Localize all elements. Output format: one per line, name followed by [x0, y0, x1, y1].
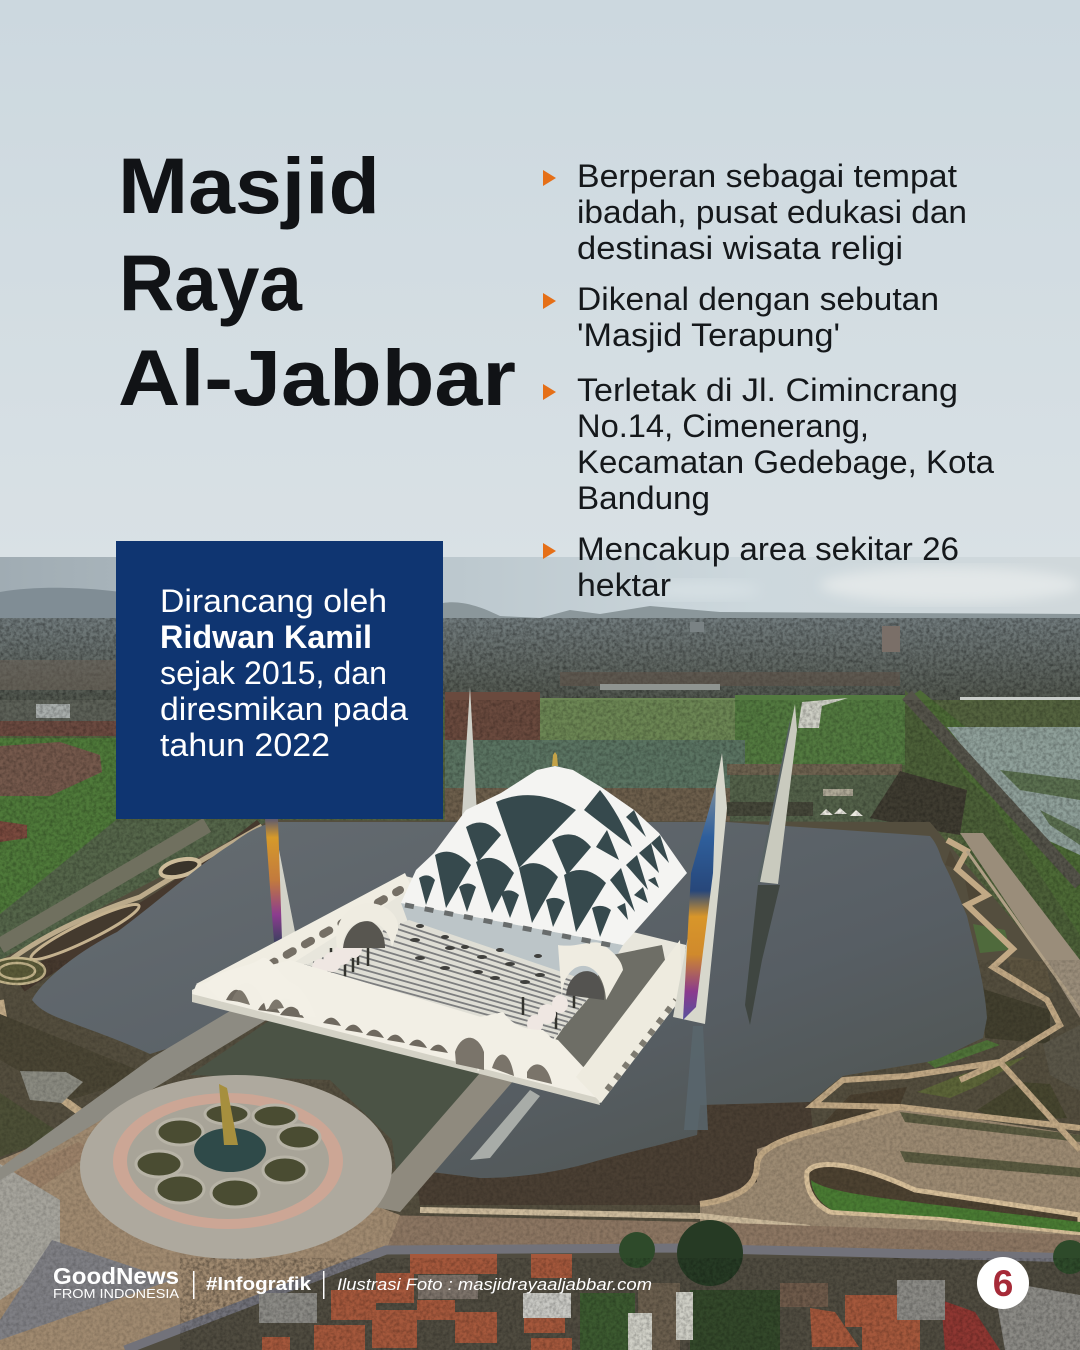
title: Al-Jabbar — [118, 333, 516, 422]
bullet: area — [543, 531, 959, 603]
hashtag: #Infografik — [206, 1274, 312, 1294]
mosque: umbrella columns right — [523, 994, 574, 1034]
mosque: front arcade — [192, 960, 600, 1098]
ground: ring garden — [0, 958, 45, 984]
logo: GoodNews from Indonesia — [53, 1263, 180, 1301]
photo: ground around the lake — [0, 820, 1080, 1350]
bullet: role: Berperan sebagai tempat — [577, 158, 957, 194]
arrow icon — [543, 384, 556, 400]
title: Masjid — [118, 141, 380, 230]
bullet: nickname: Dikenal dengan sebutan — [577, 281, 939, 317]
background: pale sky panel — [0, 0, 1080, 560]
arrow icon — [543, 170, 556, 186]
bullet list — [543, 158, 994, 603]
photo: reflection of rear right minaret — [745, 885, 780, 1025]
mosque: canopy front left — [205, 958, 316, 1017]
mosque: canopy front — [451, 1012, 573, 1086]
mosque: canopy left rear — [336, 903, 398, 950]
photo: bridge front — [365, 1073, 514, 1212]
bullet: nickname — [543, 281, 939, 353]
roundabout: octagon gardens — [136, 1104, 320, 1207]
photo credit: Ilustrasi Foto : masjidrayaaljabbar.com — [337, 1275, 652, 1294]
callout panel: designer: Dirancang oleh — [160, 583, 387, 619]
page number badge — [977, 1257, 1029, 1309]
bullet: role: ibadah, pusat edukasi dan — [577, 194, 967, 230]
callout panel: designer: Ridwan Kamil — [160, 619, 372, 655]
title: Raya — [119, 238, 303, 327]
ground: green island — [807, 1165, 1080, 1233]
mosque: floating white building — [192, 752, 687, 1105]
dome: base arches — [405, 905, 620, 947]
ground: left bank — [0, 825, 262, 1112]
photo: houses and road at the bottom — [125, 1220, 1080, 1350]
bullet: location: Terletak di Jl. Cimincrang — [577, 372, 958, 408]
mosque: umbrella columns left — [312, 938, 368, 997]
ground: winding paths — [420, 840, 1080, 1228]
aerial photo illustration — [0, 557, 1080, 1350]
photo: pool in front of the mosque — [190, 1018, 490, 1200]
mosque: platform front edge — [192, 994, 600, 1105]
bullet: nickname: 'Masjid Terapung' — [577, 317, 840, 353]
ground: bottom road apron — [380, 1215, 1080, 1262]
photo: roundabout plaza — [80, 1075, 392, 1259]
photo: minaret front right with coloured face — [673, 753, 727, 1024]
callout panel: designer: tahun 2022 — [160, 727, 330, 763]
ground: right shore garden and concrete strip — [960, 833, 1080, 1018]
photo: sky and clouds — [0, 557, 1080, 630]
callout panel: designer: sejak 2015, dan — [160, 655, 387, 691]
mosque: side walkway — [555, 945, 670, 1075]
mosque: dome — [401, 752, 687, 947]
arrow icon — [543, 543, 556, 559]
bullet: role: destinasi wisata religi — [577, 230, 903, 266]
bullet: role — [543, 158, 967, 266]
bullet: location: No.14, Cimenerang, — [577, 408, 869, 444]
photo: minaret left — [265, 819, 295, 943]
bullet: location: Kecamatan Gedebage, Kota — [577, 444, 994, 480]
photo: water chute — [470, 1090, 540, 1160]
photo: minaret rear centre — [462, 686, 477, 815]
mosque: back-left arcade — [196, 873, 412, 998]
bullet: location: Bandung — [577, 480, 710, 516]
arrow icon — [543, 293, 556, 309]
bullet: area: hektar — [577, 567, 671, 603]
mosque: right arcade — [576, 940, 682, 1103]
photo: fields behind the lake — [0, 690, 1080, 1000]
mosque: platform — [192, 876, 686, 1103]
bullet: area: Mencakup area sekitar 26 — [577, 531, 959, 567]
mosque: upper plaza — [401, 903, 623, 985]
photo: minaret rear right — [757, 704, 797, 884]
photo: distant city — [0, 618, 1080, 721]
footer — [53, 1263, 652, 1301]
mosque: canopy right — [558, 942, 623, 1000]
callout panel: designer — [116, 541, 443, 819]
ground: lower-left plaza and apron — [0, 1110, 400, 1350]
page number badge: 6 — [993, 1263, 1013, 1304]
logo: GoodNews from Indonesia: FROM INDONESIA — [53, 1287, 180, 1301]
mosque: courtyard with stair stripes — [287, 920, 600, 1042]
bullet: location — [543, 372, 994, 516]
photo: lake water — [32, 822, 987, 1178]
photo: steel tower — [684, 1026, 708, 1130]
logo: GoodNews from Indonesia: GoodNews — [53, 1263, 179, 1289]
photo: bridge left — [0, 1011, 273, 1180]
title — [118, 141, 516, 422]
ground: lower right tan area — [700, 1107, 1080, 1250]
callout panel: designer: diresmikan pada — [160, 691, 408, 727]
dome: dark glass panels — [419, 790, 669, 937]
white tents — [820, 808, 863, 816]
